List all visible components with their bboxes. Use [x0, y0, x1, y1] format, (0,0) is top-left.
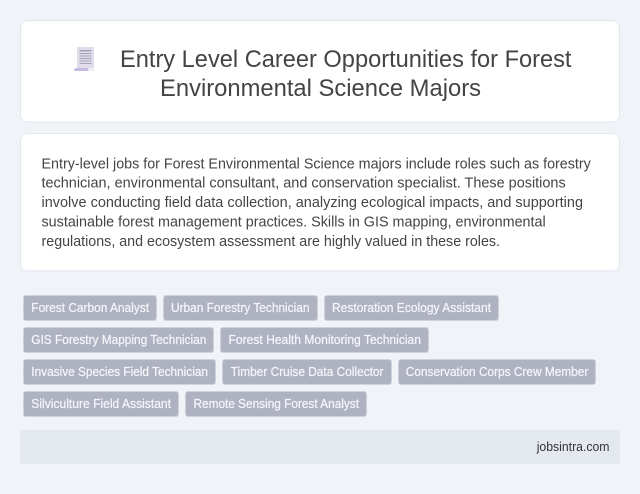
tag: Forest Carbon Analyst: Forest Carbon Analyst: [31, 300, 149, 315]
text block: description: involve conducting field data collection, analyzing ecological impacts, and supporting: [42, 195, 583, 211]
text block: description: regulations, and ecosystem assessment are highly valued in these roles.: [42, 234, 500, 250]
tag: Urban Forestry Technician: Urban Forestry Technician: [171, 300, 310, 315]
tag: Forest Health Monitoring Technician: Forest Health Monitoring Technician: [228, 332, 421, 347]
title: Environmental Science Majors: [160, 75, 481, 102]
tag: Silviculture Field Assistant: [24, 392, 178, 416]
footer text: site name: jobsintra.com: [536, 439, 610, 454]
tag: Silviculture Field Assistant: Silviculture Field Assistant: [31, 396, 171, 411]
tag: Restoration Ecology Assistant: [324, 296, 498, 320]
tag: Timber Cruise Data Collector: [222, 360, 392, 384]
tag: Invasive Species Field Technician: Invasive Species Field Technician: [31, 364, 208, 379]
tag: Restoration Ecology Assistant: Restoration Ecology Assistant: [332, 300, 491, 315]
text block: description: Entry-level jobs for Forest Environmental Science majors include roles such as forestry: [42, 156, 591, 172]
tag: Remote Sensing Forest Analyst: [186, 392, 366, 416]
title: [120, 46, 572, 102]
text block: description: sustainable forest management practices. Skills in GIS mapping, environmental: [42, 214, 546, 230]
tag: GIS Forestry Mapping Technician: [24, 328, 214, 352]
tag: Timber Cruise Data Collector: Timber Cruise Data Collector: [231, 364, 384, 379]
footer bar: [20, 430, 620, 464]
tag list: [24, 296, 596, 416]
tag: Urban Forestry Technician: [164, 296, 318, 320]
panel: description: [20, 134, 620, 271]
tag: Forest Carbon Analyst: [24, 296, 156, 320]
panel: title card: [20, 20, 620, 122]
tag: Forest Health Monitoring Technician: [220, 328, 428, 352]
tag: Invasive Species Field Technician: [24, 360, 216, 384]
text block: description: technician, environmental consultant, and conservation specialist. These positions: [42, 176, 566, 192]
title: Entry Level Career Opportunities for Forest: [120, 46, 572, 73]
text block: description: [42, 156, 591, 250]
tag: GIS Forestry Mapping Technician: GIS Forestry Mapping Technician: [31, 332, 206, 347]
icon: document scroll: [74, 47, 94, 71]
tag: Remote Sensing Forest Analyst: Remote Sensing Forest Analyst: [194, 396, 359, 411]
tag: Conservation Corps Crew Member: [398, 360, 596, 384]
tag: Conservation Corps Crew Member: Conservation Corps Crew Member: [406, 364, 589, 379]
